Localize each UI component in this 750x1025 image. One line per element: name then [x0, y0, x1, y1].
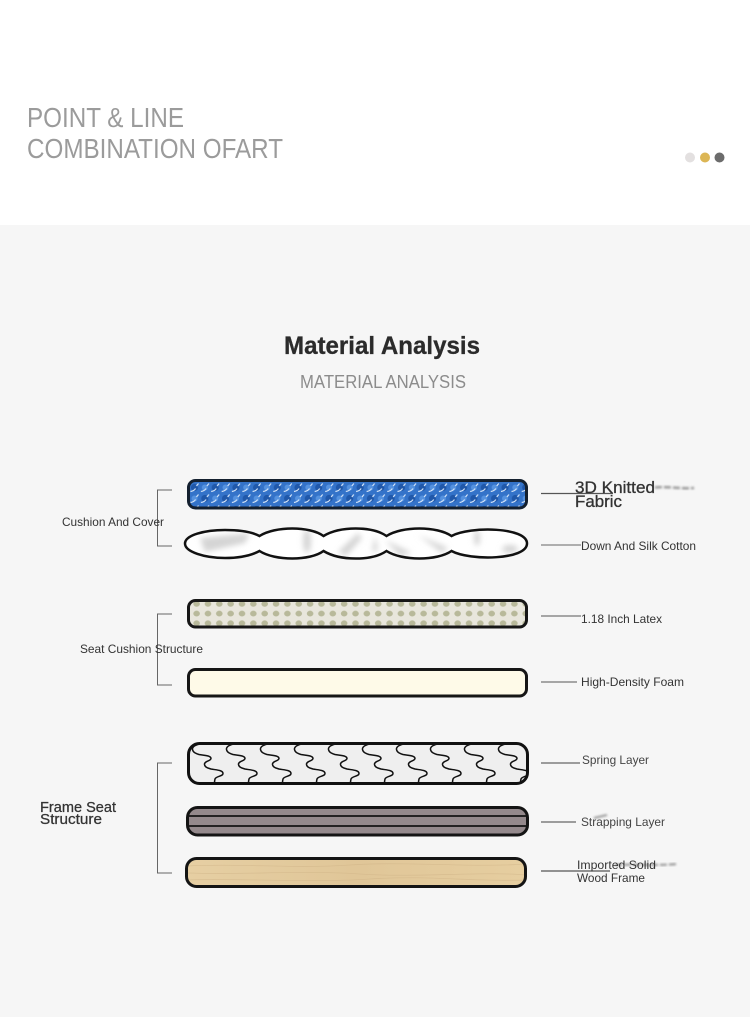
callout: imported solid wood frame [541, 858, 677, 885]
section subheading: MATERIAL ANALYSIS [300, 372, 466, 392]
callout: strapping layer: Strapping Layer [581, 815, 665, 829]
callout: down and silk cotton: Down And Silk Cotton [581, 539, 696, 553]
header title: POINT & LINE [27, 102, 184, 133]
callout: high-density foam: High-Density Foam [581, 675, 684, 689]
callout: latex [541, 612, 662, 626]
callout: spring layer: Spring Layer [582, 753, 649, 767]
label: frame seat structure: Frame Seat [40, 800, 116, 816]
callout: latex: 1.18 Inch Latex [581, 612, 662, 626]
layer: strapping [188, 808, 528, 835]
header title [27, 102, 283, 164]
decorative colour dots [685, 152, 724, 162]
callout: strapping layer [541, 815, 665, 829]
callout: 3D knitted fabric: 3D Knitted [575, 479, 655, 497]
layer: high-density foam [188, 670, 526, 696]
header title: COMBINATION OFART [27, 133, 283, 164]
layer: 3D knitted fabric [188, 480, 526, 508]
bracket: cushion and cover [158, 490, 172, 546]
layer: spring [188, 744, 528, 784]
callout: 3D knitted fabric: Fabric [575, 493, 622, 511]
label: frame seat structure: Structure [40, 812, 102, 828]
label: cushion and cover: Cushion And Cover [62, 515, 164, 529]
callout: 3D knitted fabric [541, 479, 694, 511]
layer: solid wood frame [186, 858, 526, 886]
bracket: frame seat structure [158, 763, 172, 873]
bracket: seat cushion structure [158, 614, 172, 685]
layer: down and silk cotton [185, 528, 527, 558]
callout: imported solid wood frame: Wood Frame [577, 871, 645, 885]
section heading: Material Analysis [284, 332, 480, 360]
label: seat cushion structure: Seat Cushion Structure [80, 642, 203, 656]
layer: latex [188, 600, 526, 627]
callout: spring layer [541, 753, 649, 767]
label: frame seat structure [40, 800, 116, 828]
callout: imported solid wood frame: Imported Solid [577, 858, 656, 872]
